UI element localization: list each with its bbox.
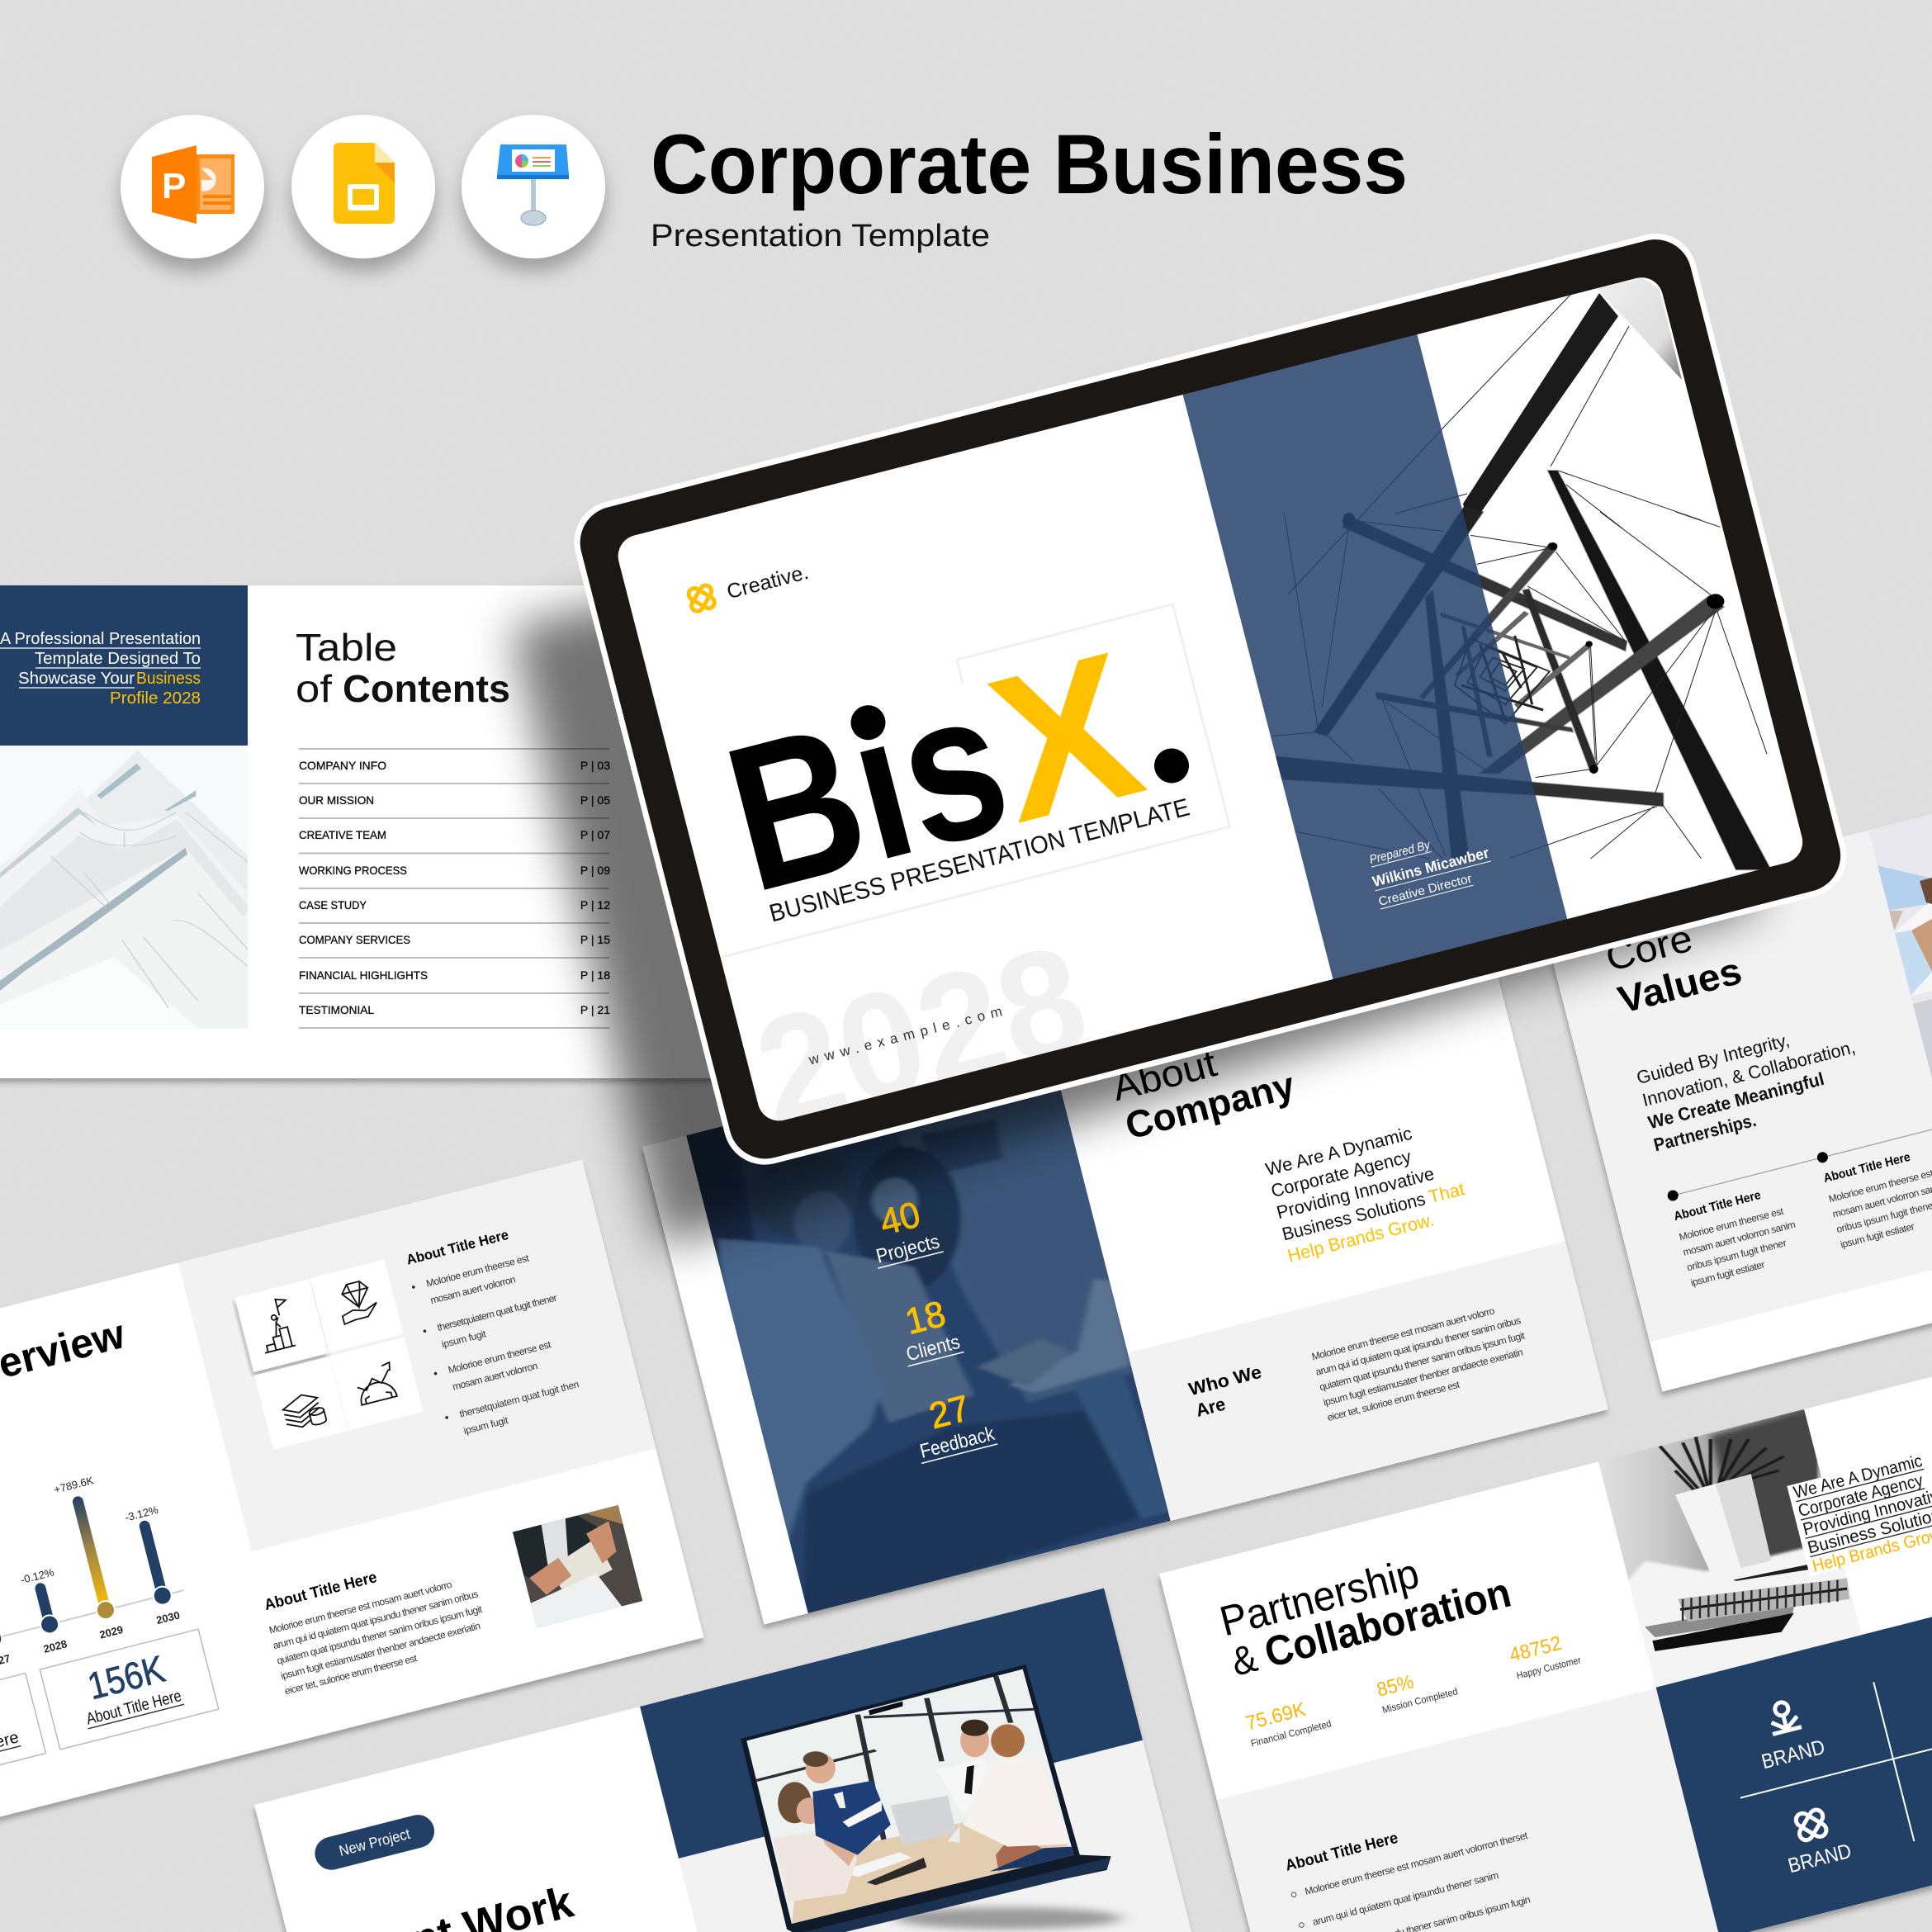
- text block: about paragraph: About Title Here: [263, 1569, 379, 1614]
- stat: feedback: Feedback: [917, 1423, 997, 1463]
- stats row: Happy Customer: [1515, 1654, 1582, 1682]
- column one: oribus ipsum fugit thener: [1686, 1237, 1788, 1273]
- statement: Business Solutions: [1280, 1188, 1428, 1244]
- laptop screen photo: [737, 1662, 1086, 1932]
- stats row: 75.69K: [1243, 1698, 1308, 1735]
- statement: That: [1427, 1178, 1466, 1207]
- photo: couple at laptop, navy tint: [686, 1090, 1169, 1613]
- text block: about title bullets: Molorioe erum theerse est: [425, 1252, 531, 1290]
- navy panel: [1656, 1583, 1932, 1932]
- ghost year: 2028: [741, 913, 1102, 1160]
- column one: About Title Here: [1673, 1188, 1762, 1224]
- stat: feedback: [906, 1383, 997, 1463]
- contents list: COMPANY INFO: [299, 759, 386, 772]
- statement: Corporate Agency: [1269, 1146, 1413, 1201]
- stat box 156K: [40, 1629, 219, 1750]
- contents list: COMPANY SERVICES: [299, 933, 410, 946]
- grey panel: [1541, 698, 1932, 1342]
- presenter: Prepared By: [1368, 838, 1432, 867]
- column two: ipsum fugit estiater: [1839, 1220, 1915, 1250]
- who we are: Who We: [1186, 1361, 1263, 1399]
- stat: projects: 40: [876, 1194, 924, 1243]
- contents list: FINANCIAL HIGHLIGHTS: [299, 968, 428, 982]
- paragraph: arum qui id quiatem quat ipsundu thener sanim oribus: [1314, 1314, 1522, 1378]
- stat: feedback: 27: [926, 1388, 973, 1437]
- grey panel: [1217, 1688, 1720, 1932]
- paragraph: Molorioe erum theerse est mosam auert volorro: [1310, 1305, 1496, 1362]
- laptop body: [741, 1664, 1111, 1932]
- website: www.example.com: [807, 1003, 1004, 1068]
- contents list: CASE STUDY: [299, 898, 367, 912]
- title: Corporate Business: [651, 117, 1408, 211]
- contents list: P | 18: [580, 968, 610, 982]
- contents list: P | 21: [580, 1003, 610, 1016]
- grey panel: [679, 1740, 1226, 1932]
- paragraph: quiatem quat ipsundu thener sanim oribus ipsum fugit: [1319, 1329, 1527, 1393]
- sidebar text: [0, 630, 201, 708]
- column one: Molorioe erum theerse est: [1678, 1205, 1785, 1243]
- text block: about title bullets: thersetquiatem quat fugit then: [458, 1378, 580, 1420]
- text block: about paragraph: [261, 1546, 491, 1697]
- sidebar text: Template Designed To: [35, 650, 201, 668]
- stat: clients: [893, 1291, 964, 1366]
- heading: [1108, 1024, 1299, 1148]
- bullet list: About Title Here: [1284, 1830, 1400, 1875]
- statement: [1263, 1114, 1472, 1267]
- stats on photo: [857, 1190, 997, 1463]
- panel: core values slide: [1541, 698, 1932, 1391]
- heading: Collaboration: [1260, 1569, 1515, 1676]
- navy photo panel: [686, 1044, 1171, 1613]
- presenter: Creative Director: [1377, 872, 1473, 909]
- icon: growth gear: [353, 1362, 398, 1405]
- stats row: 85%: [1375, 1670, 1416, 1702]
- brand grid: [1720, 1640, 1932, 1885]
- heading: Table: [296, 626, 397, 669]
- photo: notebook and plant: [1598, 1409, 1862, 1688]
- icon: PowerPoint: P: [162, 166, 186, 206]
- stat: projects: Projects: [874, 1230, 942, 1268]
- icon: Keynote: [462, 115, 605, 258]
- tablet device: [566, 225, 1855, 1173]
- statement: Innovation, & Collaboration,: [1641, 1036, 1858, 1110]
- heading: [1601, 907, 1746, 1022]
- logo word: Creative.: [724, 561, 811, 604]
- bar chart: 2028: [42, 1637, 69, 1655]
- contents list: P | 09: [580, 864, 610, 877]
- stats row: [1243, 1628, 1582, 1750]
- heading: Core: [1601, 916, 1697, 979]
- white text box over photo: We Are A Dynamic: [1792, 1451, 1925, 1503]
- statement: Guided By Integrity,: [1635, 1030, 1792, 1088]
- bullet list: [1282, 1798, 1545, 1932]
- BisX wordmark: Bis: [707, 644, 1028, 936]
- icon: brand two: [1788, 1802, 1834, 1848]
- subtitle: Presentation Template: [651, 219, 990, 253]
- sidebar text: Profile 2028: [110, 689, 201, 708]
- contents list: P | 07: [580, 828, 610, 841]
- stats row: Financial Completed: [1250, 1717, 1333, 1750]
- column one: mosam auert volorron sanim: [1682, 1219, 1797, 1258]
- text block: about paragraph: ipsum fugit estiamusater thenber andaecte exeriatin: [280, 1620, 481, 1682]
- bar chart: [0, 1459, 192, 1673]
- contents list: WORKING PROCESS: [299, 864, 407, 877]
- icon: PowerPoint: [121, 115, 264, 258]
- sidebar text: Business: [136, 670, 201, 688]
- bezel ring: [572, 232, 1849, 1167]
- blue band: [1182, 333, 1568, 981]
- text block: about paragraph: quiatem quat ipsundu thener sanim oribus ipsum fugit: [276, 1603, 484, 1667]
- laptop: [737, 1662, 1122, 1932]
- column one: [1673, 1181, 1804, 1289]
- column two: About Title Here: [1822, 1150, 1912, 1186]
- statement: Providing Innovative: [1275, 1163, 1437, 1223]
- navy header: [640, 1589, 1143, 1859]
- paragraph: eicer tet, sulorioe erum theerse est: [1326, 1379, 1461, 1423]
- grey panel: [1128, 1241, 1608, 1521]
- screen left panel: [612, 393, 1333, 1127]
- BisX wordmark: .: [1101, 597, 1214, 835]
- statement: Partnerships.: [1651, 1110, 1759, 1155]
- heading: [1215, 1528, 1515, 1685]
- contents list: OUR MISSION: [299, 793, 374, 807]
- stat box left: [0, 1673, 45, 1793]
- tagline: BUSINESS PRESENTATION TEMPLATE: [766, 793, 1192, 928]
- text block: about title bullets: mosam auert volorron: [429, 1273, 517, 1306]
- photo: handshake: [1869, 814, 1932, 1078]
- brand grid: BRAND: [1786, 1840, 1854, 1878]
- text block: about title bullets: mosam auert volorron: [451, 1360, 539, 1393]
- laptop shadow: [893, 1907, 1122, 1930]
- BisX wordmark: X: [970, 608, 1161, 867]
- contents list: P | 15: [580, 933, 610, 946]
- presenter: Wilkins Micawber: [1371, 845, 1491, 890]
- heading: Contents: [343, 667, 510, 710]
- text block: about title bullets: ipsum fugit: [462, 1414, 509, 1437]
- white text box over photo: Corporate Agency: [1797, 1470, 1925, 1521]
- icon tiles: [234, 1260, 423, 1450]
- presenter: [1366, 824, 1496, 909]
- stat box 156K: 156K: [83, 1647, 169, 1707]
- stat: clients: 18: [901, 1294, 949, 1342]
- contents list: TESTIMONIAL: [299, 1003, 374, 1016]
- sidebar panel: [0, 585, 248, 746]
- sidebar text: Showcase Your: [18, 670, 135, 688]
- grey panel: [178, 1160, 656, 1551]
- timeline: [1666, 1074, 1932, 1202]
- contents list: P | 05: [580, 793, 610, 807]
- header icons: [121, 115, 605, 258]
- bullet list: arum qui id quiatem quat ipsundu thener sanim: [1311, 1869, 1500, 1928]
- panel: new project slide: [254, 1589, 1226, 1932]
- stats row: Mission Completed: [1380, 1685, 1459, 1716]
- bar chart: +789.6K: [53, 1474, 95, 1496]
- bar chart: 2030: [155, 1608, 181, 1627]
- statement: [1635, 1014, 1868, 1155]
- bar chart: 2029: [98, 1623, 125, 1641]
- tablet shadow: [512, 363, 1759, 1247]
- panel: overview slide: [0, 1160, 704, 1854]
- text block: about title bullets: ipsum fugit: [440, 1328, 488, 1350]
- statement: Help Brands Grow.: [1286, 1209, 1436, 1267]
- faint frame: [663, 604, 1230, 958]
- bar chart: -3.12%: [124, 1503, 160, 1524]
- building photo: [0, 745, 249, 1031]
- heading: [296, 626, 510, 710]
- photo: hand writing: [513, 1505, 642, 1628]
- stat: clients: Clients: [904, 1331, 963, 1366]
- who we are: Are: [1194, 1394, 1228, 1421]
- contents list: CREATIVE TEAM: [299, 828, 386, 841]
- contents list: P | 12: [580, 898, 610, 912]
- screen content: [627, 405, 1519, 1163]
- icon: Google Slides: [291, 115, 435, 258]
- panel: about company slide: [642, 931, 1608, 1624]
- contents list: P | 03: [580, 759, 610, 772]
- text block: about paragraph: arum qui id quiatem quat ipsundu thener sanim oribus: [272, 1588, 480, 1651]
- heading: Values: [1613, 949, 1746, 1021]
- icon: brand one: [1765, 1699, 1802, 1734]
- paragraph: [1310, 1299, 1534, 1423]
- pill: [311, 1811, 438, 1873]
- column two: Molorioe erum theerse est: [1827, 1167, 1932, 1205]
- heading: Partnership: [1215, 1549, 1423, 1645]
- brand grid: BRAND: [1759, 1735, 1827, 1773]
- logo mark: [682, 579, 721, 618]
- statement: We Create Meaningful: [1646, 1068, 1826, 1133]
- text block: about title bullets: About Title Here: [405, 1227, 510, 1268]
- text block: about paragraph: eicer tet, sulorioe erum theerse est: [283, 1652, 419, 1697]
- stat: projects: [862, 1191, 944, 1268]
- statement: We Are A Dynamic: [1263, 1123, 1414, 1180]
- icon: flag on steps: [253, 1297, 297, 1353]
- bar chart: -0.12%: [19, 1565, 55, 1586]
- heading: of: [296, 667, 332, 710]
- tablet body: [566, 225, 1855, 1173]
- column one: ipsum fugit estiater: [1689, 1258, 1766, 1289]
- white text box over photo: [1787, 1424, 1932, 1577]
- text block: about title bullets: [403, 1219, 585, 1440]
- laptop notch: [869, 1702, 902, 1715]
- icon: diamond in hand: [335, 1278, 380, 1324]
- BisX wordmark: [707, 595, 1214, 936]
- who we are: [1186, 1361, 1269, 1421]
- column two: [1822, 1144, 1932, 1250]
- steel structure photo: [1183, 277, 1771, 869]
- contents list: [299, 749, 610, 1028]
- stat box 156K: About Title Here: [84, 1687, 183, 1729]
- heading: Company: [1121, 1063, 1299, 1148]
- icon: money stack: [281, 1390, 327, 1432]
- text block: about title bullets: Molorioe erum theerse est: [447, 1338, 552, 1376]
- heading: About: [1108, 1041, 1221, 1109]
- stats row: 48752: [1507, 1632, 1564, 1667]
- pill: New Project: [338, 1825, 412, 1859]
- panel: partnership slide: [1159, 1357, 1932, 1932]
- paragraph: ipsum fugit estiamusater thenber andaecte exeriatin: [1322, 1347, 1524, 1409]
- text block: about paragraph: Molorioe erum theerse est mosam auert volorro: [268, 1579, 453, 1636]
- text block: about title bullets: thersetquiatem quat fugit thener: [436, 1292, 558, 1333]
- sidebar text: A Professional Presentation: [0, 630, 201, 648]
- panel: table of contents slide: [0, 585, 793, 1078]
- heading: &: [1227, 1636, 1262, 1685]
- bullet list: Molorioe erum theerse est mosam auert volorron therset: [1304, 1830, 1529, 1897]
